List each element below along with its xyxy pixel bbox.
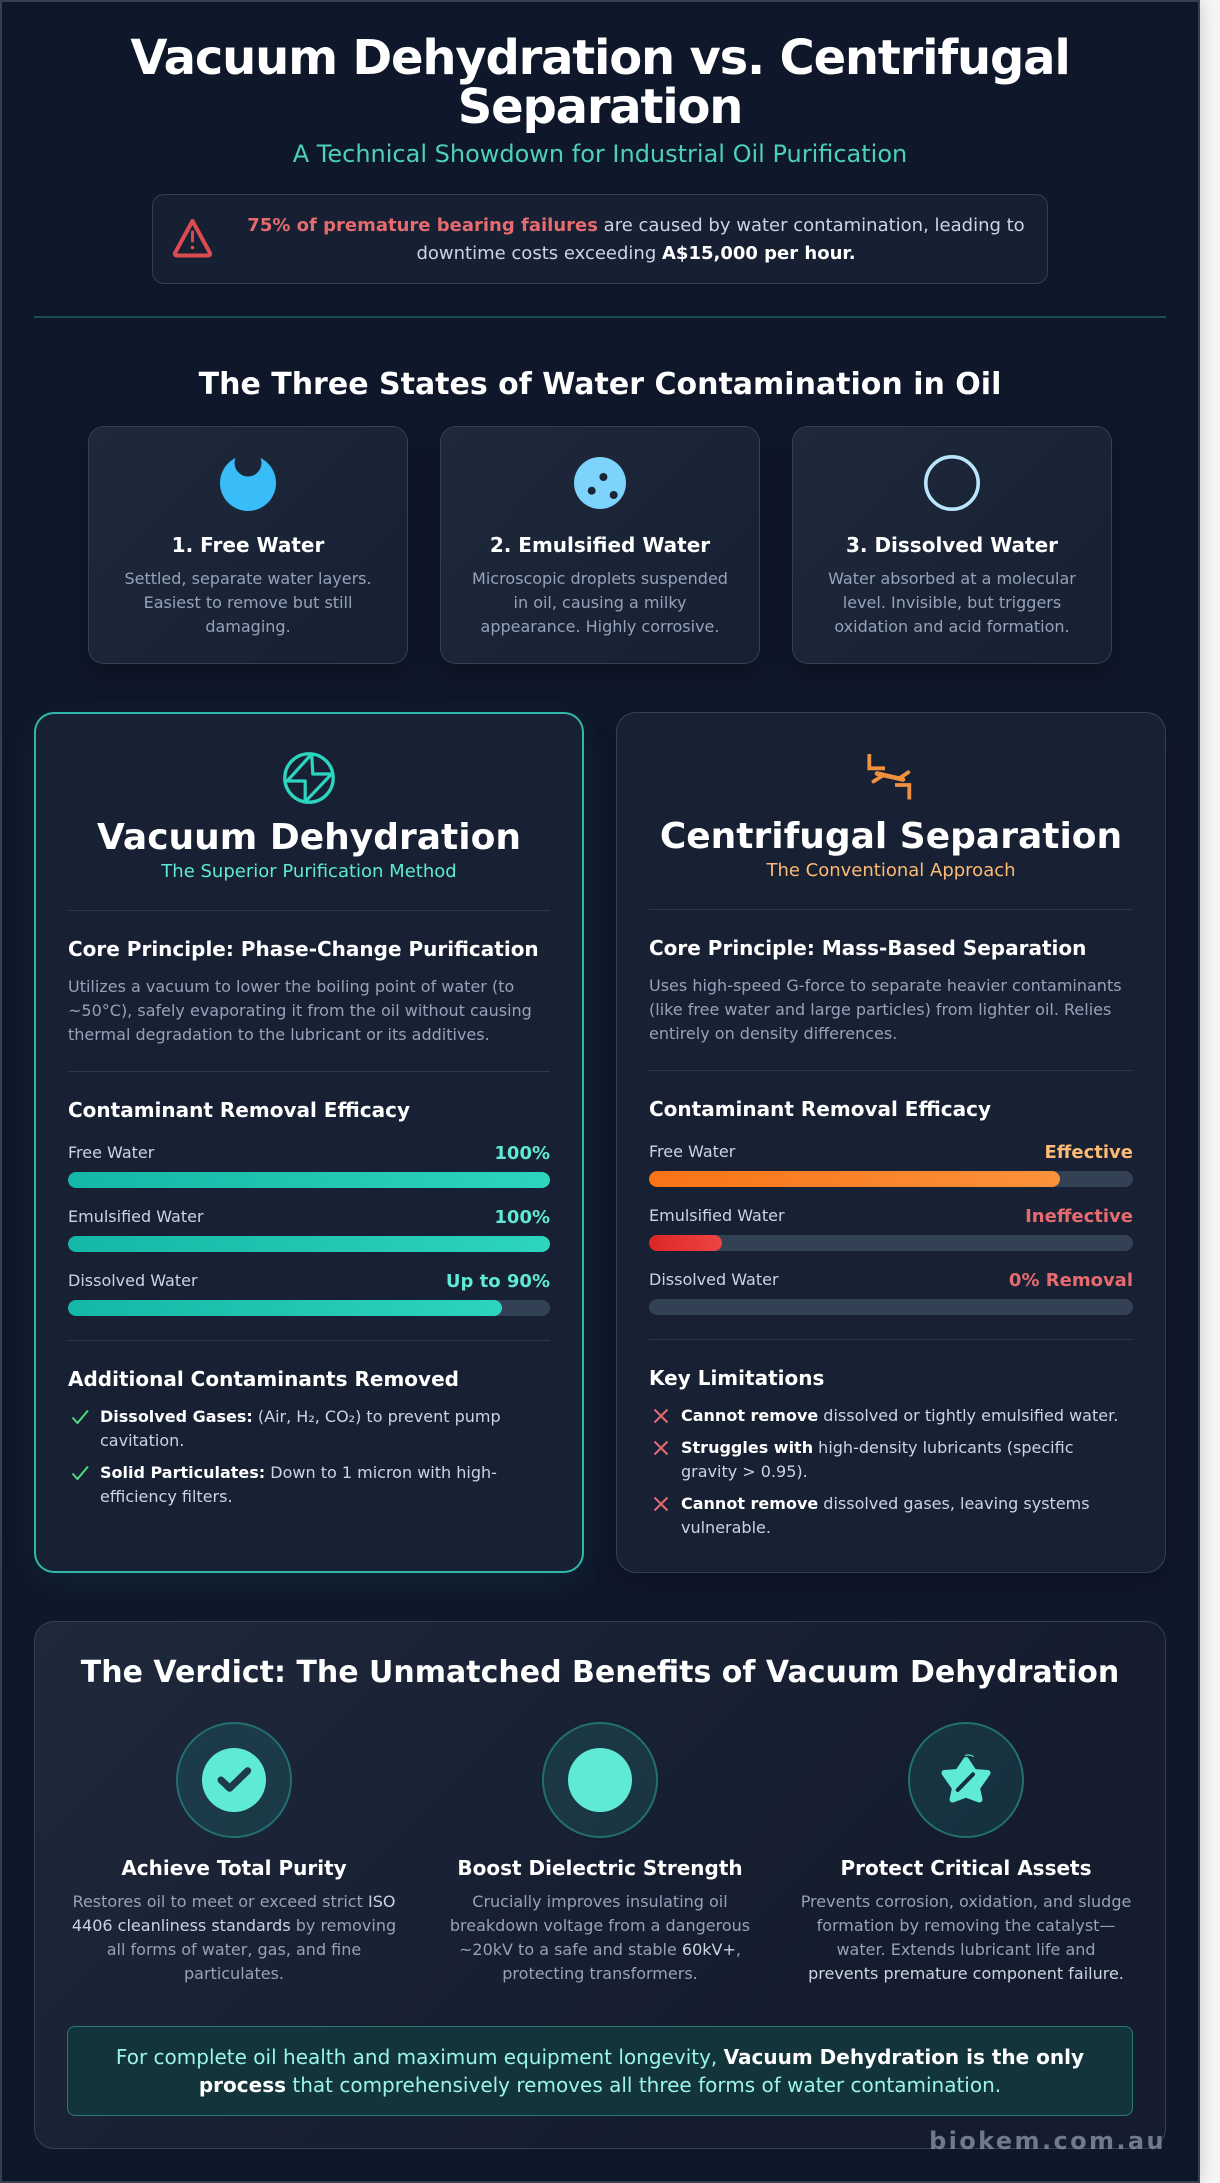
list item: struggles bbox=[681, 1438, 1073, 1481]
benefit: total purity bbox=[72, 1722, 396, 1983]
core principle text: entirely on density differences. bbox=[649, 1024, 897, 1043]
card text: appearance. Highly corrosive. bbox=[481, 617, 719, 636]
benefit text: Prevents corrosion, oxidation, and sludge bbox=[801, 1892, 1131, 1911]
card heading: 2. Emulsified Water bbox=[490, 533, 710, 557]
alert panel bbox=[152, 194, 1048, 284]
panel title: Vacuum Dehydration bbox=[97, 817, 521, 858]
panel subtitle: The Superior Purification Method bbox=[161, 861, 457, 882]
label: emulsified water: Emulsified Water bbox=[68, 1207, 204, 1226]
list item: dissolved gases: cavitation. bbox=[100, 1431, 184, 1450]
value: emulsified water: Ineffective bbox=[1025, 1206, 1133, 1227]
value: dissolved water: 0% Removal bbox=[1009, 1270, 1133, 1291]
subtitle: A Technical Showdown for Industrial Oil Purification bbox=[293, 140, 907, 168]
benefit text: breakdown voltage from a dangerous bbox=[450, 1916, 750, 1935]
core principle text: Utilizes a vacuum to lower the boiling point of water (to bbox=[68, 977, 514, 996]
heading: verdict: The Verdict: The Unmatched Benefits of Vacuum Dehydration bbox=[81, 1655, 1119, 1690]
core principle text: (like free water and large particles) from lighter oil. Relies bbox=[649, 1000, 1111, 1019]
alert text bbox=[247, 215, 1025, 264]
title: Separation bbox=[458, 79, 742, 135]
benefit text: water. Extends lubricant life and bbox=[836, 1940, 1096, 1959]
benefit text: protecting transformers. bbox=[502, 1964, 698, 1983]
icon: star badge bbox=[908, 1722, 1024, 1838]
watermark: biokem.com.au bbox=[929, 2127, 1166, 2155]
card heading: 1. Free Water bbox=[172, 533, 324, 557]
core principle text bbox=[649, 976, 1122, 1043]
bar: dissolved water bbox=[649, 1299, 1133, 1315]
list item: cannot remove water: Cannot remove dissolved or tightly emulsified water. bbox=[681, 1406, 1118, 1425]
label: dissolved water: Dissolved Water bbox=[68, 1271, 198, 1290]
benefit text bbox=[450, 1892, 750, 1983]
benefit text: particulates. bbox=[184, 1964, 284, 1983]
panel: dissolved water bbox=[792, 426, 1112, 664]
card text: Settled, separate water layers. bbox=[124, 569, 372, 588]
alert text: 75% of premature bearing failures are caused by water contamination, leading to bbox=[247, 215, 1025, 236]
card text: level. Invisible, but triggers bbox=[843, 593, 1061, 612]
benefit text: formation by removing the catalyst— bbox=[817, 1916, 1115, 1935]
heading: efficacy: Contaminant Removal Efficacy bbox=[649, 1097, 991, 1121]
label: free water: Free Water bbox=[649, 1142, 735, 1161]
benefit text bbox=[72, 1892, 396, 1983]
icon: centrifugal bbox=[867, 754, 912, 800]
icon: cross bbox=[654, 1440, 668, 1456]
list item: solid particulates: Solid Particulates: Down to 1 micron with high- bbox=[100, 1463, 497, 1482]
icon: dissolved water bbox=[924, 455, 980, 511]
benefit heading: Protect Critical Assets bbox=[840, 1856, 1092, 1880]
icon: solid circle badge bbox=[542, 1722, 658, 1838]
benefit: dielectric strength bbox=[450, 1722, 750, 1983]
benefit heading: Achieve Total Purity bbox=[121, 1856, 347, 1880]
card text: oxidation and acid formation. bbox=[834, 617, 1070, 636]
heading: core principle: Core Principle: Phase-Change Purification bbox=[68, 937, 539, 961]
icon: bolt in circle bbox=[283, 752, 335, 804]
value: free water: 100% bbox=[494, 1143, 550, 1164]
icon: check bbox=[72, 1466, 89, 1480]
icon: cross bbox=[654, 1408, 668, 1424]
card text: Easiest to remove but still bbox=[144, 593, 352, 612]
benefit text: prevents premature component failure. bbox=[808, 1964, 1124, 1983]
heading: efficacy: Contaminant Removal Efficacy bbox=[68, 1098, 410, 1122]
icon: warning triangle bbox=[172, 218, 212, 258]
panel: vacuum dehydration bbox=[34, 712, 584, 1573]
core principle text bbox=[68, 977, 532, 1044]
icon: emulsified water bbox=[574, 457, 626, 509]
bar chart: efficacy bbox=[68, 1143, 550, 1316]
alert text: downtime costs exceeding A$15,000 per hour. bbox=[416, 243, 856, 264]
bar chart: efficacy bbox=[649, 1142, 1133, 1315]
list item: dissolved gases: Dissolved Gases: (Air, H₂, CO₂) to prevent pump bbox=[100, 1407, 501, 1426]
benefit text bbox=[801, 1892, 1131, 1983]
label: dissolved water: Dissolved Water bbox=[649, 1270, 779, 1289]
title: Vacuum Dehydration vs. Centrifugal bbox=[130, 30, 1070, 86]
panel: free water bbox=[88, 426, 408, 664]
panel: centrifugal separation bbox=[616, 712, 1166, 1573]
benefit heading: Boost Dielectric Strength bbox=[457, 1856, 743, 1880]
icon: cross bbox=[654, 1496, 668, 1512]
bar: emulsified water bbox=[649, 1235, 1133, 1251]
card text bbox=[124, 569, 372, 636]
list item: cannot remove gases: Cannot remove dissolved gases, leaving systems bbox=[681, 1494, 1090, 1513]
value: free water: Effective bbox=[1045, 1142, 1133, 1163]
value: emulsified water: 100% bbox=[494, 1207, 550, 1228]
value: dissolved water: Up to 90% bbox=[446, 1271, 550, 1292]
panel: emulsified water bbox=[440, 426, 760, 664]
bar: free water bbox=[68, 1172, 550, 1188]
card text bbox=[828, 569, 1076, 636]
card heading: 3. Dissolved Water bbox=[846, 533, 1058, 557]
bar: emulsified water bbox=[68, 1236, 550, 1252]
benefit text: Restores oil to meet or exceed strict ISO bbox=[73, 1892, 395, 1911]
card text: Microscopic droplets suspended bbox=[472, 569, 728, 588]
bar: free water bbox=[649, 1171, 1133, 1187]
icon: check bbox=[72, 1410, 89, 1424]
callout text: process that comprehensively removes all three forms of water contamination. bbox=[199, 2073, 1001, 2097]
list item: solid particulates bbox=[100, 1463, 497, 1506]
icon: check badge bbox=[176, 1722, 292, 1838]
core principle text: Uses high-speed G-force to separate heavier contaminants bbox=[649, 976, 1122, 995]
callout: conclusion bbox=[67, 2026, 1133, 2116]
list item: dissolved gases bbox=[100, 1407, 501, 1450]
benefit text: ~20kV to a safe and stable 60kV+, bbox=[459, 1940, 741, 1959]
card text: damaging. bbox=[205, 617, 291, 636]
list item: struggles: gravity > 0.95). bbox=[681, 1462, 808, 1481]
list item: cannot remove gases: vulnerable. bbox=[681, 1518, 771, 1537]
heading: key limitations: Key Limitations bbox=[649, 1366, 824, 1390]
callout text: For complete oil health and maximum equipment longevity, Vacuum Dehydration is the only bbox=[116, 2045, 1084, 2069]
label: free water: Free Water bbox=[68, 1143, 154, 1162]
core principle text: thermal degradation to the lubricant or its additives. bbox=[68, 1025, 490, 1044]
list item: cannot remove gases bbox=[681, 1494, 1090, 1537]
title bbox=[130, 30, 1070, 135]
benefit text: all forms of water, gas, and fine bbox=[107, 1940, 361, 1959]
callout text bbox=[116, 2045, 1084, 2097]
benefit text: 4406 cleanliness standards by removing bbox=[72, 1916, 396, 1935]
panel subtitle: The Conventional Approach bbox=[766, 860, 1016, 881]
heading: additional contaminants: Additional Contaminants Removed bbox=[68, 1367, 459, 1391]
heading: three states: The Three States of Water Contamination in Oil bbox=[199, 367, 1001, 402]
heading: core principle: Core Principle: Mass-Based Separation bbox=[649, 936, 1086, 960]
core principle text: ~50°C), safely evaporating it from the oil without causing bbox=[68, 1001, 532, 1020]
card text: in oil, causing a milky bbox=[514, 593, 686, 612]
label: emulsified water: Emulsified Water bbox=[649, 1206, 785, 1225]
benefit text: Crucially improves insulating oil bbox=[472, 1892, 728, 1911]
icon: free water bbox=[220, 458, 276, 511]
panel: verdict bbox=[34, 1621, 1166, 2149]
benefit: critical assets bbox=[801, 1722, 1131, 1983]
list item: solid particulates: efficiency filters. bbox=[100, 1487, 233, 1506]
card text bbox=[472, 569, 728, 636]
card text: Water absorbed at a molecular bbox=[828, 569, 1076, 588]
list item: struggles: Struggles with high-density lubricants (specific bbox=[681, 1438, 1073, 1457]
panel title: Centrifugal Separation bbox=[660, 816, 1122, 857]
bar: dissolved water bbox=[68, 1300, 550, 1316]
